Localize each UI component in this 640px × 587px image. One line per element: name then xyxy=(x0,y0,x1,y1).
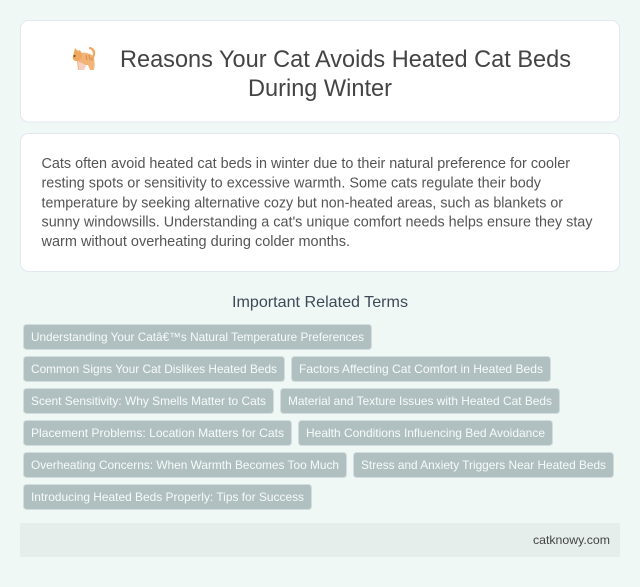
tag: common signs: Common Signs Your Cat Dislikes Heated Beds xyxy=(31,362,277,376)
footer: site name: catknowy.com xyxy=(533,533,610,547)
tag: health conditions xyxy=(298,420,552,446)
panel: description xyxy=(20,134,620,272)
tag: material and texture xyxy=(280,388,560,414)
title: Reasons Your Cat Avoids Heated Cat Beds xyxy=(120,46,571,73)
title: During Winter xyxy=(248,75,392,102)
text block: description paragraph: Cats often avoid heated cat beds in winter due to their natural preference for cooler xyxy=(42,156,570,172)
tag: common signs xyxy=(24,356,284,382)
tag: stress and anxiety: Stress and Anxiety Triggers Near Heated Beds xyxy=(361,458,606,472)
tag: placement problems xyxy=(24,420,292,446)
text block: description paragraph: warm without overheating during colder months. xyxy=(40,234,350,250)
heading: important related terms: Important Related Terms xyxy=(232,294,408,311)
title xyxy=(120,46,571,102)
icon: cat xyxy=(73,47,95,70)
tag list: related terms xyxy=(24,324,614,510)
tag: natural temperature preferences: Understanding Your Catâ€™s Natural Temperature Preferences xyxy=(31,330,364,344)
text block: description paragraph: temperature by seeking alternative cozy but non-heated areas, such as blankets or xyxy=(42,196,563,212)
tag: stress and anxiety xyxy=(354,452,614,478)
tag: factors affecting comfort xyxy=(292,356,550,382)
tag: scent sensitivity xyxy=(24,388,274,414)
tag: overheating concerns: Overheating Concerns: When Warmth Becomes Too Much xyxy=(31,458,339,472)
tag: health conditions: Health Conditions Influencing Bed Avoidance xyxy=(306,426,545,440)
tag: scent sensitivity: Scent Sensitivity: Why Smells Matter to Cats xyxy=(31,394,266,408)
tag: placement problems: Placement Problems: Location Matters for Cats xyxy=(31,426,284,440)
panel: title header xyxy=(20,20,620,122)
tag: introducing heated beds xyxy=(24,484,312,510)
text block: description paragraph: resting spots or sensitivity to excessive warmth. Some cats regulate their body xyxy=(42,176,542,192)
tag: natural temperature preferences xyxy=(24,324,372,350)
tag: factors affecting comfort: Factors Affecting Cat Comfort in Heated Beds xyxy=(299,362,543,376)
tag: introducing heated beds: Introducing Heated Beds Properly: Tips for Success xyxy=(31,490,304,504)
tag: material and texture: Material and Texture Issues with Heated Cat Beds xyxy=(288,394,552,408)
tag: overheating concerns xyxy=(24,452,346,478)
text block: description paragraph xyxy=(40,156,593,250)
footer xyxy=(20,523,620,557)
text block: description paragraph: sunny windowsills. Understanding a cat's unique comfort needs helps ensure they stay xyxy=(42,214,593,230)
